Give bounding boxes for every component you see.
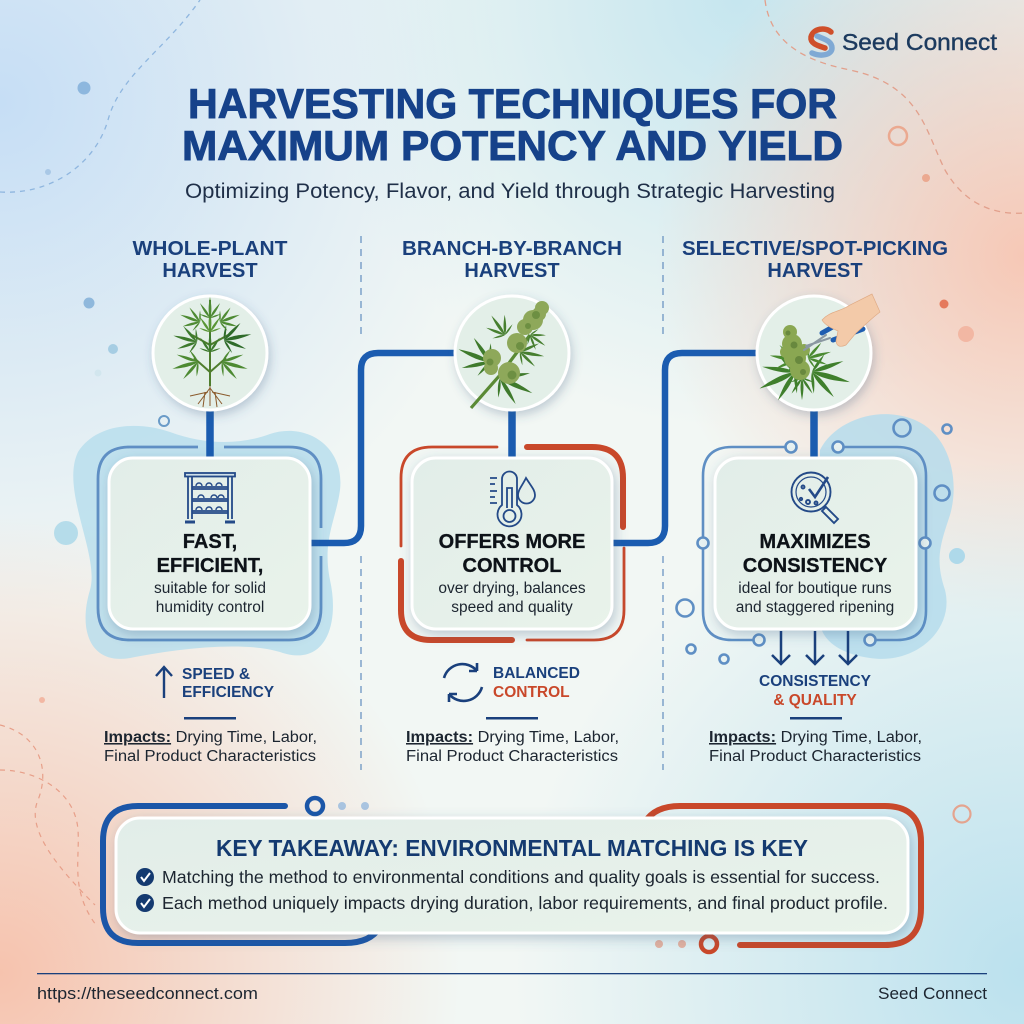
column 1: whole-plant bbox=[98, 238, 321, 765]
card bbox=[116, 818, 908, 933]
card bbox=[109, 458, 310, 629]
decorative dots bbox=[338, 802, 686, 948]
icon: scissors bbox=[804, 320, 863, 350]
image circle: branch bbox=[452, 296, 569, 410]
heading bbox=[402, 238, 622, 282]
bullet 1: Matching the method to environmental conditions and quality goals is essential for success. bbox=[162, 867, 880, 887]
label: consistency and quality: & QUALITY bbox=[773, 692, 857, 709]
card text: and staggered ripening bbox=[736, 599, 894, 616]
impacts: Impacts: Drying Time, Labor, bbox=[709, 729, 922, 746]
label: speed and efficiency: EFFICIENCY bbox=[182, 684, 275, 701]
card text: FAST, bbox=[183, 531, 237, 553]
bullet 2: Each method uniquely impacts drying duration, labor requirements, and final product profile. bbox=[162, 893, 888, 913]
impacts: Final Product Characteristics bbox=[709, 748, 921, 765]
heading: KEY TAKEAWAY: ENVIRONMENTAL MATCHING IS KEY bbox=[216, 835, 808, 861]
card text: CONSISTENCY bbox=[743, 555, 888, 577]
icon: three down arrows bbox=[772, 631, 857, 664]
icon: cycle arrows bbox=[444, 663, 482, 702]
card text bbox=[154, 531, 266, 616]
label: consistency and quality bbox=[759, 673, 872, 709]
heading: HARVEST bbox=[767, 260, 863, 282]
title: MAXIMUM POTENCY AND YIELD bbox=[182, 122, 843, 169]
label: speed and efficiency: SPEED & bbox=[182, 666, 250, 683]
impacts: Impacts: Drying Time, Labor, bbox=[104, 729, 317, 746]
card text bbox=[736, 531, 894, 616]
impacts bbox=[104, 717, 317, 765]
image circle: whole plant bbox=[153, 296, 267, 410]
impacts: Impacts: Drying Time, Labor, bbox=[406, 729, 619, 746]
card text: EFFICIENT, bbox=[157, 555, 263, 577]
column 3: selective/spot-picking bbox=[676, 238, 965, 765]
frame: orange bbox=[645, 806, 921, 952]
frame: blue bbox=[103, 798, 381, 943]
subtitle: Optimizing Potency, Flavor, and Yield through Strategic Harvesting bbox=[185, 179, 835, 203]
card text: speed and quality bbox=[451, 599, 573, 616]
card text: MAXIMIZES bbox=[759, 531, 871, 553]
connectors bbox=[210, 353, 814, 543]
panel: background blob left bbox=[73, 426, 340, 659]
heading: SELECTIVE/SPOT-PICKING bbox=[682, 238, 948, 260]
icon: logo S bbox=[811, 29, 832, 55]
label: consistency and quality: CONSISTENCY bbox=[759, 673, 872, 690]
url: https://theseedconnect.com bbox=[37, 985, 258, 1003]
footer bbox=[37, 973, 987, 1003]
impacts bbox=[406, 717, 619, 765]
frame with nodes bbox=[676, 420, 965, 664]
icon: hand bbox=[822, 294, 880, 346]
label: balanced control: BALANCED bbox=[493, 665, 580, 682]
frame bbox=[401, 447, 624, 640]
card text: CONTROL bbox=[463, 555, 561, 577]
logo bbox=[811, 29, 998, 55]
icon: thermometer and drop bbox=[490, 472, 535, 526]
panel: key takeaway bbox=[103, 798, 921, 952]
image circle: spot picking bbox=[751, 294, 880, 410]
label: speed and efficiency bbox=[182, 666, 275, 701]
card bbox=[412, 458, 612, 629]
heading: WHOLE-PLANT bbox=[132, 238, 288, 260]
card text: humidity control bbox=[156, 599, 264, 616]
impacts: Final Product Characteristics bbox=[406, 748, 618, 765]
heading: BRANCH-BY-BRANCH bbox=[402, 238, 622, 260]
icon: magnifier inspection bbox=[792, 472, 838, 523]
brand name: Seed Connect bbox=[842, 29, 998, 55]
impacts bbox=[709, 717, 922, 765]
card text bbox=[438, 531, 586, 616]
card text: over drying, balances bbox=[438, 580, 586, 597]
heading: HARVEST bbox=[162, 260, 258, 282]
impacts: Final Product Characteristics bbox=[104, 748, 316, 765]
label: balanced control bbox=[493, 665, 580, 701]
label: balanced control: CONTROL bbox=[493, 684, 570, 701]
card bbox=[715, 458, 916, 629]
icon: drying rack bbox=[185, 473, 235, 522]
panel: background blob right bbox=[820, 414, 954, 659]
card text: suitable for solid bbox=[154, 580, 266, 597]
heading bbox=[682, 238, 948, 282]
frame bbox=[98, 447, 321, 640]
brand: Seed Connect bbox=[878, 985, 987, 1003]
title: HARVESTING TECHNIQUES FOR bbox=[188, 80, 837, 127]
heading bbox=[132, 238, 288, 282]
icon: up arrow bbox=[156, 667, 172, 698]
column 2: branch-by-branch bbox=[401, 238, 624, 765]
card text: OFFERS MORE bbox=[439, 531, 585, 553]
heading: HARVEST bbox=[464, 260, 560, 282]
title bbox=[182, 80, 843, 169]
column dividers bbox=[361, 236, 663, 770]
card text: ideal for boutique runs bbox=[738, 580, 892, 597]
